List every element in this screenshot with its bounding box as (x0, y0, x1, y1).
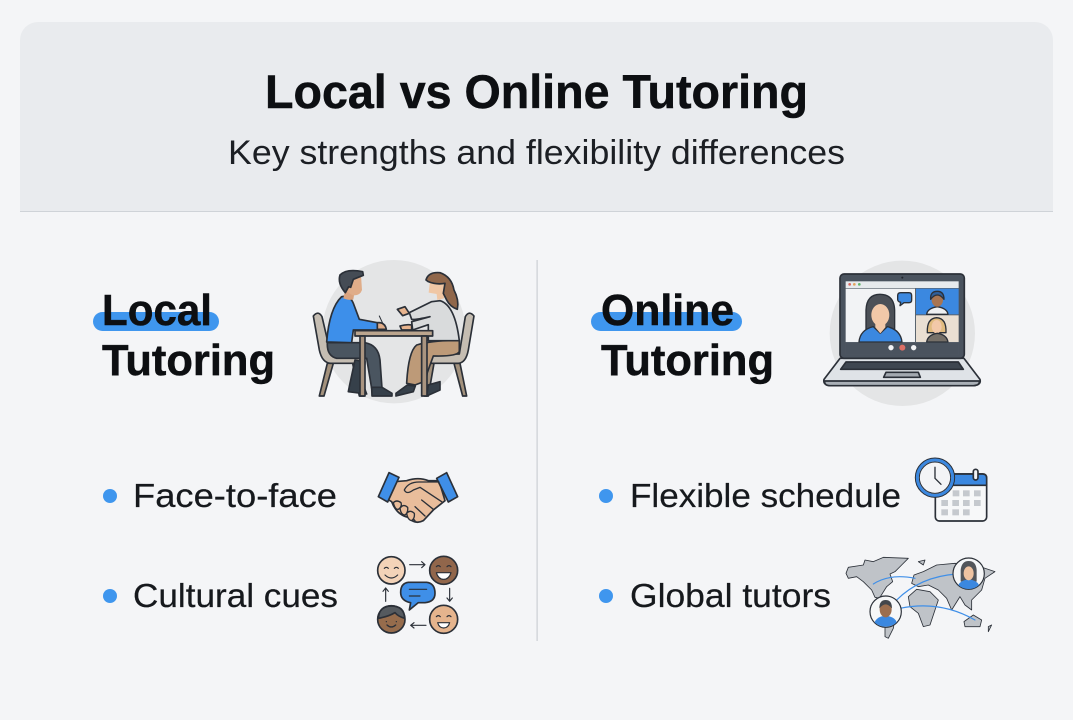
icon: two people at a table (313, 260, 474, 403)
heading: local tutoring: Local (102, 286, 212, 335)
bullet: cultural cues: Cultural cues (133, 577, 338, 614)
woman (407, 341, 459, 385)
table (355, 331, 433, 336)
heading: online tutoring (591, 286, 774, 385)
panel: local tutoring (93, 260, 474, 633)
panel: online tutoring (591, 261, 995, 638)
man (348, 360, 367, 394)
heading: online tutoring: Tutoring (601, 336, 774, 385)
bullet: global tutors: Global tutors (630, 577, 831, 614)
header panel (20, 22, 1053, 212)
heading: online tutoring: Online (601, 286, 734, 335)
bullet: flexible schedule: Flexible schedule (630, 477, 901, 514)
heading: local tutoring: Tutoring (102, 336, 275, 385)
heading: local tutoring (93, 286, 275, 385)
icon: cultural cues faces (378, 556, 458, 633)
icon: laptop video call (824, 261, 980, 406)
subtitle: Key strengths and flexibility differences (228, 134, 845, 172)
bullet: face-to-face: Face-to-face (133, 477, 337, 514)
icon: world map with tutors (846, 557, 995, 638)
icon: handshake (378, 473, 458, 522)
icon: clock and calendar (915, 458, 987, 521)
title: Local vs Online Tutoring (265, 65, 808, 118)
